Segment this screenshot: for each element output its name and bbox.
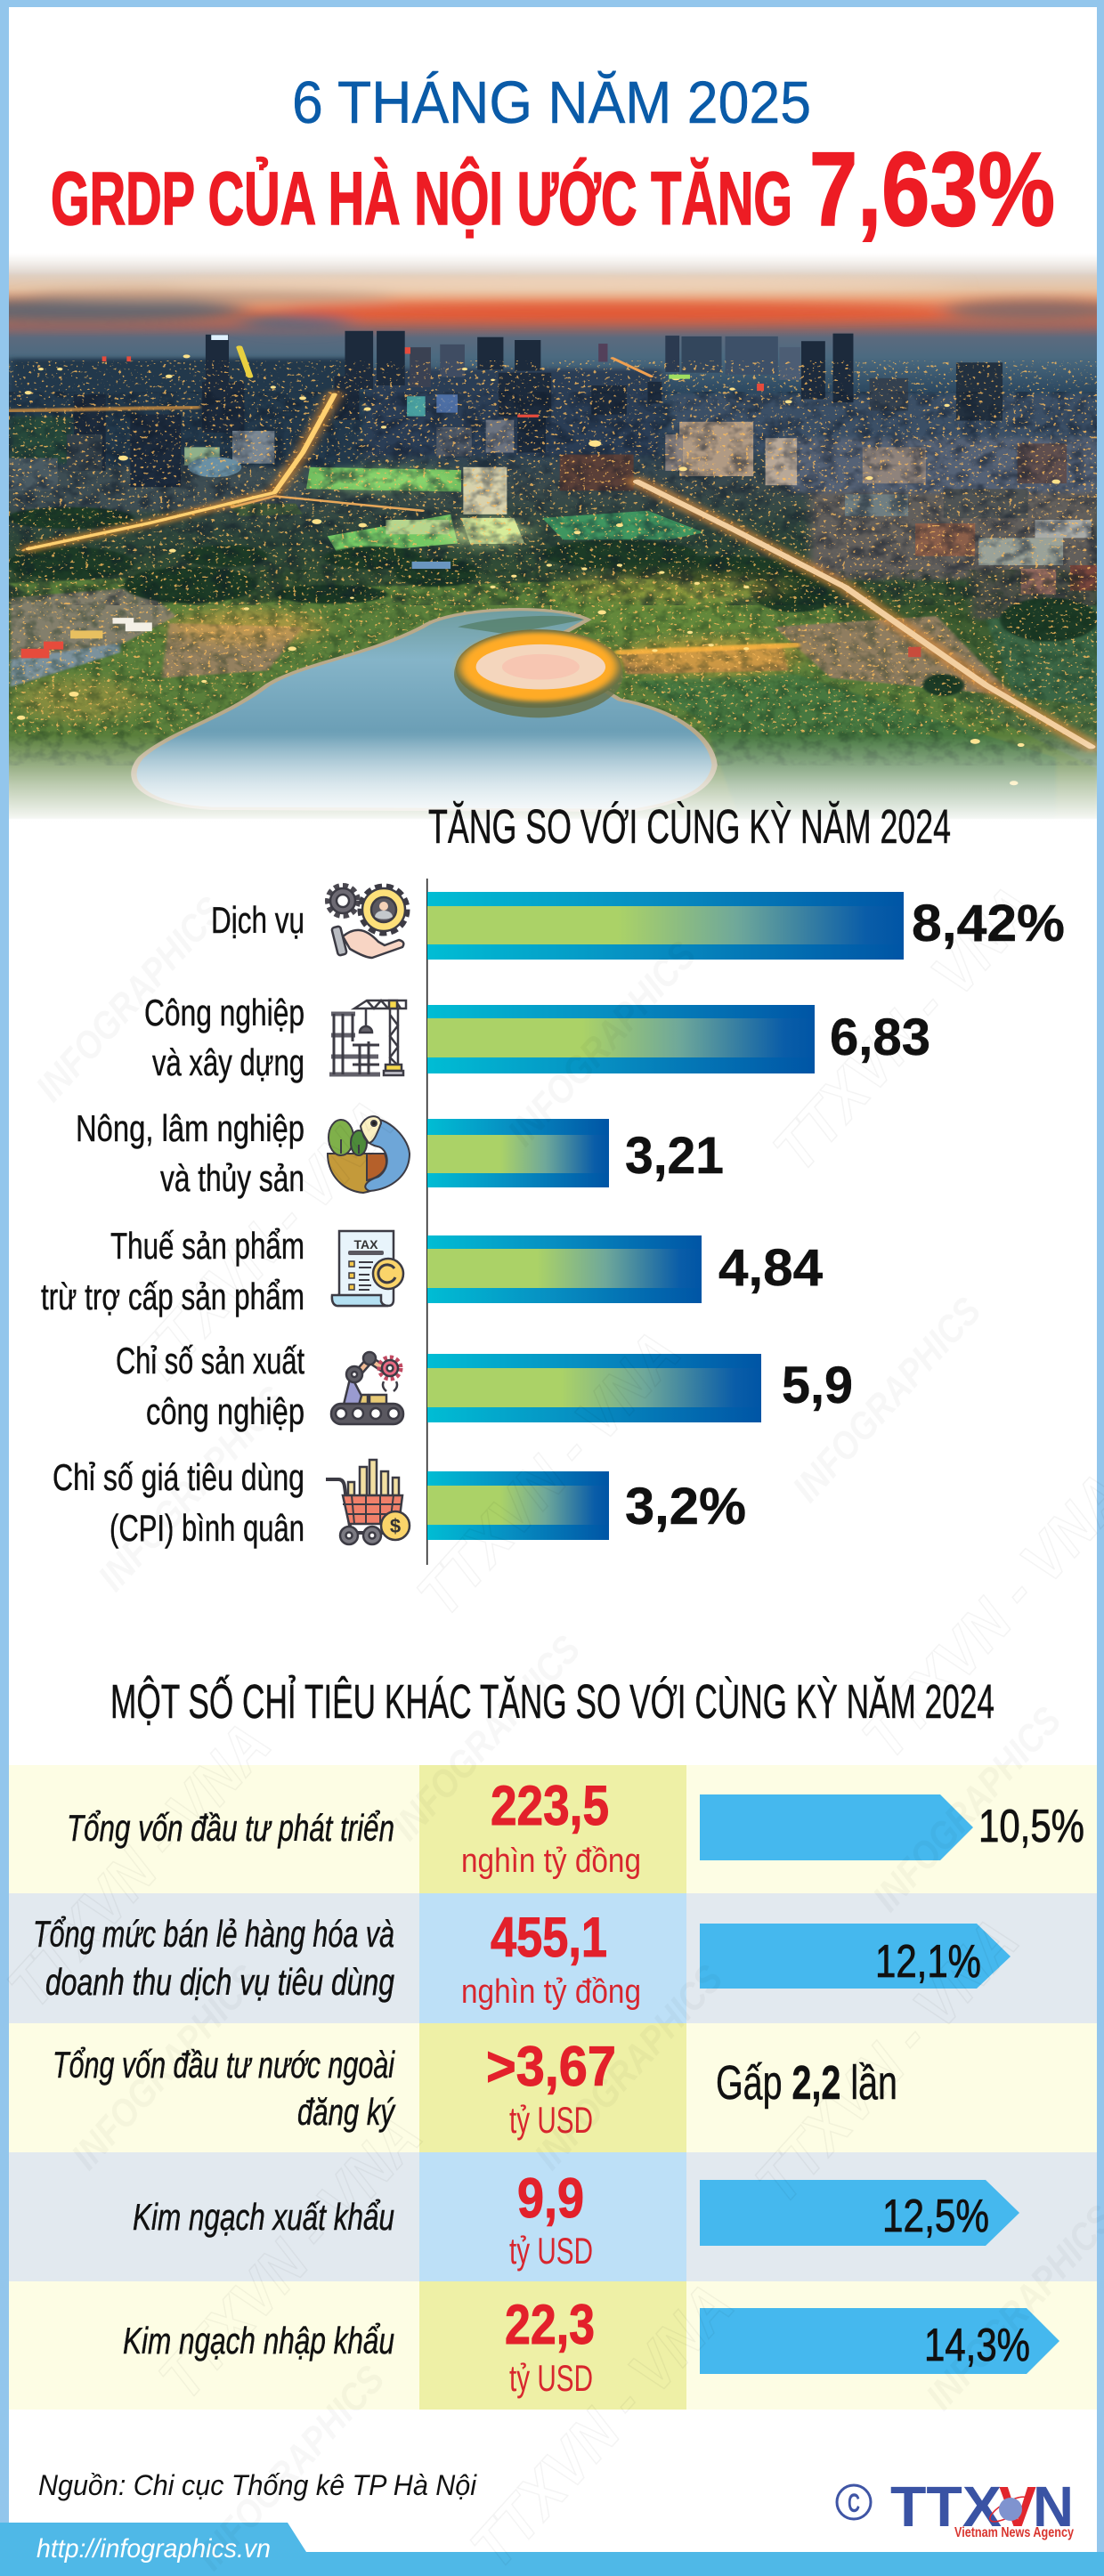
land around the lake: [8, 576, 1097, 819]
bar: Nông, lâm nghiệp và thủy sản 3,21: và thủy sản: [160, 1157, 304, 1199]
bar: Chỉ số giá tiêu dùng (CPI) bình quân 3,2%: (CPI) bình quân: [110, 1507, 304, 1549]
watermarks: INFOGRAPHICS: [90, 1378, 295, 1600]
watermarks: INFOGRAPHICS: [188, 2357, 393, 2576]
title line: GRDP headline: 7,63%: [809, 131, 1055, 248]
row: Tổng vốn đầu tư phát triển: nghìn tỷ đồng: [461, 1843, 641, 1880]
city texture: dark and warm speckle: [9, 360, 1097, 766]
row: Tổng mức bán lẻ: [9, 1893, 1097, 2023]
bar: Dịch vụ 8,42%: 8,42%: [912, 895, 1065, 952]
watermarks: TTXVN - VNA: [742, 1906, 1032, 2216]
bar: Chỉ số giá tiêu dùng (CPI) bình quân 3,2%: 3,2%: [625, 1478, 746, 1535]
row: Kim ngạch nhập khẩu: 14,3%: [924, 2320, 1030, 2371]
bar: Chỉ số sản xuất công nghiệp 5,9: Chỉ số sản xuất: [116, 1340, 304, 1381]
watermarks: [0, 873, 1104, 2576]
bar: Công nghiệp và xây dựng 6,83: Công nghiệp: [144, 992, 304, 1033]
roads lit by street lamps: [8, 347, 1092, 747]
row: Kim ngạch xuất khẩu: Kim ngạch xuất khẩu: [133, 2196, 394, 2238]
lamp lights: [17, 354, 1060, 785]
bar: Nông, lâm nghiệp và thủy sản 3,21: 3,21: [625, 1127, 724, 1185]
towers are decorative silhouettes: [74, 331, 1003, 487]
hero photo: Hanoi city skyline at dusk with lake park: [0, 249, 1104, 824]
bar: Nông, lâm nghiệp và thủy sản 3,21: [76, 1107, 724, 1199]
watermarks: INFOGRAPHICS: [384, 1627, 589, 1849]
lit green sports fields: [225, 467, 704, 555]
row: Kim ngạch xuất khẩu: 9,9: [517, 2167, 584, 2230]
row: Kim ngạch xuất khẩu: 12,5%: [882, 2191, 989, 2242]
logo: TTXVN Vietnam News Agency: Vietnam News Agency: [954, 2525, 1074, 2540]
watermarks: TTXVN - VNA: [759, 873, 1050, 1184]
row: Tổng mức bán lẻ: Tổng mức bán lẻ hàng hóa và: [33, 1913, 394, 1955]
bar: Công nghiệp và xây dựng 6,83: và xây dựng: [152, 1041, 304, 1083]
watermarks: TTXVN - VNA: [403, 1318, 694, 1629]
row: Tổng vốn đầu tư nước ngoài đăng ký: >3,67: [486, 2036, 616, 2098]
bar: Chỉ số giá tiêu dùng (CPI) bình quân 3,2%: Chỉ số giá tiêu dùng: [53, 1456, 304, 1498]
logo: TTXVN Vietnam News Agency: [837, 2475, 1074, 2540]
bar: Nông, lâm nghiệp và thủy sản 3,21: Nông, lâm nghiệp: [76, 1107, 304, 1149]
footer strip: [0, 2523, 1104, 2576]
icon: construction crane and building: [329, 1000, 406, 1075]
row: Kim ngạch xuất khẩu: tỷ USD: [509, 2230, 593, 2272]
icon: shopping cart with dollar coin: $: [390, 1515, 401, 1537]
watermarks: INFOGRAPHICS: [499, 933, 704, 1154]
watermarks: INFOGRAPHICS: [526, 1956, 731, 2178]
bar: Dịch vụ 8,42%: Dịch vụ: [211, 899, 304, 941]
lake: [134, 610, 715, 810]
row: Tổng vốn đầu tư nước ngoài đăng ký: Gấp 2,2 lần: [716, 2056, 897, 2110]
bar: Chỉ số sản xuất công nghiệp 5,9: công nghiệp: [146, 1390, 304, 1432]
row: Tổng mức bán lẻ: doanh thu dịch vụ tiêu dùng: [45, 1961, 394, 2003]
icon: tax document: [332, 1231, 403, 1306]
icon: trees, soil and fish: [328, 1116, 410, 1193]
logo: TTXVN Vietnam News Agency: C: [848, 2489, 860, 2518]
row: Kim ngạch nhập khẩu: 22,3: [505, 2294, 595, 2356]
bar: Chỉ số giá tiêu dùng (CPI) bình quân 3,2%: [53, 1456, 746, 1549]
bar: Chỉ số sản xuất công nghiệp 5,9: [116, 1340, 853, 1432]
watermarks: TTXVN - VNA: [457, 2271, 747, 2576]
table: other indicators: [9, 1765, 1097, 2410]
watermarks: INFOGRAPHICS: [63, 1956, 268, 2178]
bar: Thuế sản phẩm trừ trợ cấp sản phẩm 4,84: 4,84: [718, 1239, 823, 1297]
row: Tổng vốn đầu tư phát triển: 223,5: [491, 1775, 609, 1837]
row: Tổng vốn đầu tư phát triển: Tổng vốn đầu tư phát triển: [67, 1807, 394, 1849]
row: Kim ngạch nhập khẩu: [9, 2281, 1097, 2410]
row: Kim ngạch xuất khẩu: [9, 2152, 1097, 2281]
bar: Dịch vụ 8,42%: [211, 892, 1065, 960]
row: Tổng vốn đầu tư nước ngoài đăng ký: tỷ USD: [509, 2099, 593, 2141]
title line: GRDP headline: [51, 131, 1055, 248]
source note: Nguồn: Chi cục Thống kê TP Hà Nội: [38, 2469, 477, 2501]
icon: tax document: TAX: [354, 1237, 378, 1252]
row: Tổng mức bán lẻ: nghìn tỷ đồng: [461, 1973, 641, 2011]
watermarks: TTXVN - VNA: [118, 1087, 409, 1397]
row: Tổng vốn đầu tư nước ngoài đăng ký: đăng ký: [297, 2091, 396, 2133]
logo: TTXVN Vietnam News Agency: TTX: [890, 2475, 1002, 2539]
row: Kim ngạch nhập khẩu: Kim ngạch nhập khẩu: [123, 2320, 394, 2361]
logo: TTXVN Vietnam News Agency: N: [1033, 2475, 1074, 2539]
chart axis: [426, 879, 427, 1565]
logo: TTXVN Vietnam News Agency: V: [999, 2475, 1036, 2539]
icon: gears and hand: [328, 886, 408, 958]
bar: Thuế sản phẩm trừ trợ cấp sản phẩm 4,84: [41, 1225, 823, 1317]
bar chart: growth by sector: [41, 879, 1065, 1565]
row: Tổng vốn đầu tư nước ngoài đăng ký: [9, 2023, 1097, 2152]
footer strip: http://infographics.vn: [37, 2534, 271, 2564]
row: Tổng mức bán lẻ: 455,1: [491, 1907, 607, 1969]
row: Tổng mức bán lẻ: 12,1%: [875, 1936, 981, 1988]
bar: Công nghiệp và xây dựng 6,83: [144, 992, 930, 1083]
bar: Chỉ số sản xuất công nghiệp 5,9: 5,9: [782, 1357, 853, 1414]
title line: 6 tháng năm 2025: 6 THÁNG NĂM 2025: [292, 69, 811, 136]
row: Tổng vốn đầu tư nước ngoài đăng ký: Tổng vốn đầu tư nước ngoài: [53, 2044, 395, 2086]
row: Tổng vốn đầu tư phát triển: [9, 1765, 1097, 1893]
bar: Công nghiệp và xây dựng 6,83: 6,83: [830, 1009, 930, 1066]
watermarks: TTXVN - VNA: [0, 1710, 284, 2021]
bar: Thuế sản phẩm trừ trợ cấp sản phẩm 4,84: trừ trợ cấp sản phẩm: [41, 1276, 304, 1317]
watermarks: INFOGRAPHICS: [28, 888, 232, 1110]
island plaza: [454, 629, 623, 717]
icon: shopping cart with dollar coin: [326, 1460, 410, 1544]
row: Kim ngạch nhập khẩu: tỷ USD: [509, 2357, 593, 2399]
watermarks: INFOGRAPHICS: [784, 1289, 989, 1511]
watermarks: INFOGRAPHICS: [865, 1698, 1069, 1920]
watermarks: TTXVN - VNA: [145, 2102, 435, 2412]
icon: robot arm and conveyor: [331, 1352, 403, 1424]
bar: Thuế sản phẩm trừ trợ cấp sản phẩm 4,84: Thuế sản phẩm: [110, 1225, 304, 1267]
